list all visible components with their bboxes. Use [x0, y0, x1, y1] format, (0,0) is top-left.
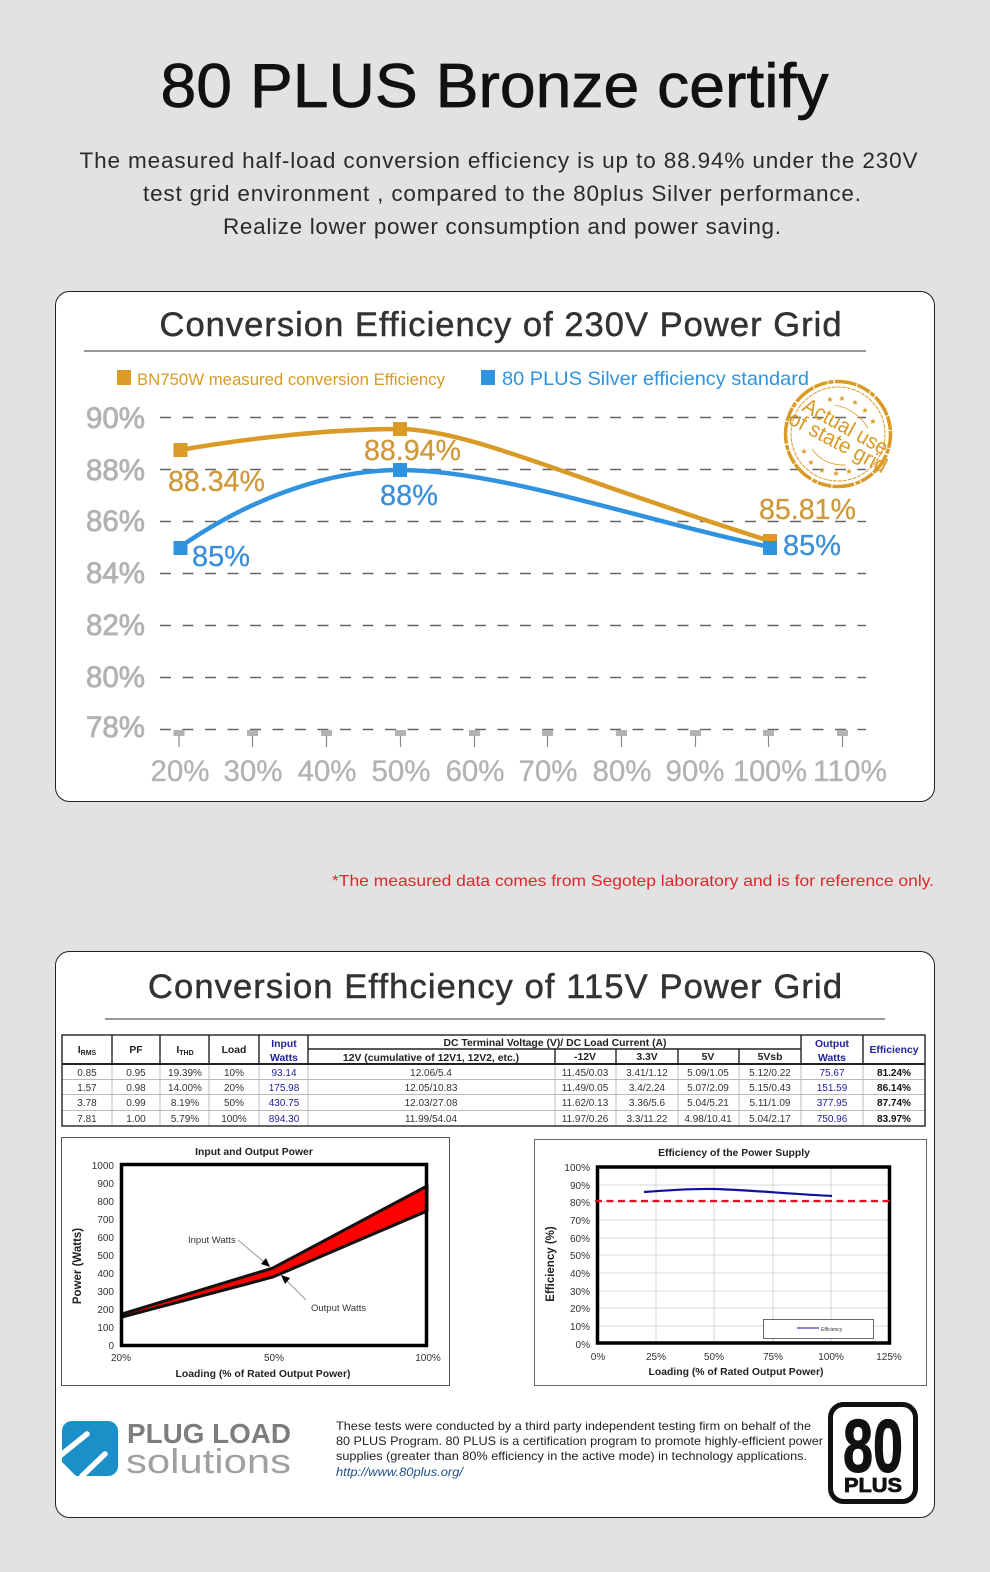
stamp: actual use of state grid: ★ — [845, 467, 853, 476]
intro text block — [80, 148, 918, 239]
x axis labels: 70% — [518, 755, 578, 788]
chart: input and output power: 600 — [97, 1233, 114, 1244]
testing note: 80 PLUS Program. 80 PLUS is a certification program to promote highly-efficient power — [336, 1434, 823, 1448]
table header: 5V — [702, 1052, 714, 1063]
y axis labels: 78% — [86, 711, 145, 744]
label: output watts arrow — [281, 1275, 366, 1314]
logo: plug load solutions: PLUG LOAD — [127, 1418, 291, 1449]
table rows: 11.62/0.13 — [562, 1098, 609, 1109]
y axis labels: 80% — [86, 661, 145, 694]
stamp: actual use of state grid: ★ — [818, 466, 826, 475]
chart: efficiency of the power supply: 10% — [570, 1322, 590, 1333]
table rows: 93.14 — [271, 1068, 297, 1079]
chart: input and output power: 0 — [108, 1341, 114, 1352]
series: measured efficiency line: 85.81% — [759, 494, 856, 526]
logo: plug load solutions: solutions — [126, 1443, 291, 1481]
chart: input and output power: 300 — [97, 1287, 114, 1298]
panel: 230V efficiency chart — [56, 292, 934, 802]
table header: 3.3V — [636, 1052, 658, 1063]
stamp: actual use of state grid: ★ — [869, 417, 877, 426]
series: measured efficiency line: 88.34% — [168, 466, 265, 498]
table rows: 50% — [224, 1098, 244, 1109]
data table — [62, 1035, 925, 1126]
table rows: 11.99/54.04 — [405, 1114, 457, 1125]
label: input watts arrow — [188, 1235, 270, 1267]
table rows: 750.96 — [817, 1114, 848, 1125]
chart: efficiency of the power supply: Efficiency (%) — [545, 1226, 557, 1302]
x axis labels: 100% — [733, 755, 807, 788]
chart: efficiency of the power supply: 75% — [763, 1352, 783, 1363]
heading: 115V chart: Conversion Effhciency of 115V Power Grid — [148, 968, 842, 1006]
table header: Input — [271, 1039, 297, 1050]
chart: efficiency of the power supply — [534, 1140, 926, 1386]
chart: efficiency of the power supply: 125% — [876, 1352, 902, 1363]
chart: efficiency of the power supply: 90% — [570, 1181, 590, 1192]
table rows: 83.97% — [877, 1114, 911, 1125]
testing note: http://www.80plus.org/ — [336, 1465, 465, 1479]
table rows: 100% — [221, 1114, 247, 1125]
table rows: 5.79% — [171, 1114, 199, 1125]
table rows: 5.09/1.05 — [687, 1068, 729, 1079]
table header: DC Terminal Voltage (V)/ DC Load Current (A) — [443, 1038, 667, 1049]
table rows: 377.95 — [817, 1098, 848, 1109]
logo: 80 plus: 80 — [843, 1404, 903, 1488]
chart: efficiency of the power supply: Efficiency of the Power Supply — [658, 1148, 810, 1159]
chart: input and output power: 100 — [97, 1323, 114, 1334]
chart: input and output power: 900 — [97, 1179, 114, 1190]
chart: efficiency of the power supply: 100% — [818, 1352, 844, 1363]
chart legend — [764, 1320, 874, 1338]
stamp: actual use of state grid: ★ — [851, 398, 859, 407]
table rows: 87.74% — [877, 1098, 911, 1109]
chart: input and output power: Loading (% of Rated Output Power) — [176, 1369, 350, 1380]
table rows: 11.97/0.26 — [562, 1114, 609, 1125]
chart: efficiency of the power supply: 50% — [570, 1251, 590, 1262]
chart: efficiency of the power supply: 60% — [570, 1234, 590, 1245]
table rows: 86.14% — [877, 1083, 911, 1094]
table rows: 11.45/0.03 — [562, 1068, 609, 1079]
table header: 5Vsb — [758, 1052, 782, 1063]
x axis labels: 110% — [813, 755, 887, 788]
table rows: 3.3/11.22 — [627, 1114, 668, 1125]
table rows: 5.15/0.43 — [749, 1083, 791, 1094]
x axis labels: 80% — [592, 755, 652, 788]
chart: input and output power: 1000 — [92, 1161, 114, 1172]
table rows: 1.00 — [126, 1114, 146, 1125]
table rows: 20% — [224, 1083, 244, 1094]
table header: Watts — [270, 1053, 298, 1064]
series: silver standard line — [174, 463, 841, 573]
chart: input and output power: 20% — [111, 1353, 131, 1364]
table rows: 7.81 — [77, 1114, 97, 1125]
table rows: 0.85 — [77, 1068, 97, 1079]
label: output watts arrow: Output Watts — [311, 1303, 366, 1314]
chart: input and output power: 800 — [97, 1197, 114, 1208]
table header: Load — [222, 1045, 246, 1056]
chart: efficiency of the power supply: 40% — [570, 1269, 590, 1280]
x axis labels: 20% — [150, 755, 210, 788]
table header: I — [78, 1045, 81, 1056]
series: silver standard line: 88% — [380, 480, 438, 512]
chart: efficiency of the power supply: 25% — [646, 1352, 666, 1363]
table rows: 12.05/10.83 — [405, 1083, 458, 1094]
table rows: 0.98 — [126, 1083, 146, 1094]
testing note: These tests were conducted by a third party independent testing firm on behalf of the — [336, 1419, 811, 1433]
table header: Watts — [818, 1053, 846, 1064]
chart: efficiency of the power supply: 20% — [570, 1304, 590, 1315]
logo: 80 plus — [830, 1404, 916, 1502]
table rows: 14.00% — [168, 1083, 202, 1094]
x axis labels: 60% — [445, 755, 505, 788]
table rows: 894.30 — [269, 1114, 300, 1125]
table header — [78, 1038, 919, 1064]
intro text block: Realize lower power consumption and power saving. — [223, 214, 781, 239]
title: 80 PLUS Bronze certify — [160, 52, 828, 121]
chart: input and output power: 50% — [264, 1353, 284, 1364]
chart: input and output power: 500 — [97, 1251, 114, 1262]
series: silver standard line: 85% — [192, 541, 250, 573]
table rows: 175.98 — [269, 1083, 300, 1094]
table header: PF — [129, 1045, 143, 1056]
table rows: 5.07/2.09 — [687, 1083, 729, 1094]
intro text block: The measured half-load conversion efficiency is up to 88.94% under the 230V — [80, 148, 918, 173]
chart: efficiency of the power supply: 50% — [704, 1352, 724, 1363]
table rows: 12.03/27.08 — [405, 1098, 458, 1109]
table header: RMS — [81, 1050, 97, 1057]
stamp: actual use of state grid: ★ — [800, 447, 808, 456]
table rows: 10% — [224, 1068, 244, 1079]
table rows: 3.36/5.6 — [629, 1098, 666, 1109]
testing note — [336, 1419, 823, 1479]
table rows — [77, 1068, 911, 1125]
chart: input and output power: 100% — [415, 1353, 441, 1364]
table rows: 3.41/1.12 — [626, 1068, 668, 1079]
table rows: 0.95 — [126, 1068, 146, 1079]
table header: Efficiency — [869, 1045, 919, 1056]
table rows: 8.19% — [171, 1098, 199, 1109]
label: input watts arrow: Input Watts — [188, 1235, 236, 1246]
table header: 12V (cumulative of 12V1, 12V2, etc.) — [343, 1053, 519, 1064]
table rows: 3.78 — [77, 1098, 97, 1109]
heading: 230V chart: Conversion Efficiency of 230V Power Grid — [160, 306, 842, 344]
stamp: actual use of state grid — [785, 382, 892, 486]
legend: measured efficiency: BN750W measured conversion Efficiency — [137, 370, 445, 389]
chart: input and output power — [62, 1138, 450, 1386]
x axis labels — [150, 755, 887, 788]
stamp: actual use of state grid: of state grid — [785, 406, 891, 478]
table rows: 4.98/10.41 — [684, 1114, 732, 1125]
table header: -12V — [574, 1052, 596, 1063]
legend: silver standard: 80 PLUS Silver efficiency standard — [502, 368, 809, 390]
table rows: 12.06/5.4 — [410, 1068, 452, 1079]
chart: efficiency of the power supply: 0% — [591, 1352, 605, 1363]
chart: input and output power: 400 — [97, 1269, 114, 1280]
table rows: 75.67 — [819, 1068, 845, 1079]
table header: Output — [815, 1039, 850, 1050]
testing note: supplies (greater than 80% efficiency in the active mode) in technology applications. — [336, 1449, 807, 1463]
table rows: 81.24% — [877, 1068, 911, 1079]
table header: THD — [179, 1050, 194, 1057]
y axis labels: 86% — [86, 505, 145, 538]
table rows: 430.75 — [269, 1098, 300, 1109]
series: measured efficiency line — [168, 422, 856, 548]
y axis labels: 82% — [86, 609, 145, 642]
chart: input and output power: 700 — [97, 1215, 114, 1226]
x axis labels: 50% — [371, 755, 431, 788]
chart: input and output power: 200 — [97, 1305, 114, 1316]
chart: efficiency of the power supply: 80% — [570, 1198, 590, 1209]
table rows: 19.39% — [168, 1068, 202, 1079]
stamp: actual use of state grid: ★ — [861, 406, 869, 415]
series: silver standard line: 85% — [783, 530, 841, 562]
table rows: 5.11/1.09 — [750, 1098, 791, 1109]
stamp: actual use of state grid: ★ — [838, 394, 846, 403]
chart: efficiency of the power supply: 70% — [570, 1216, 590, 1227]
logo: plug load solutions — [61, 1418, 291, 1481]
table rows: 3.4/2.24 — [629, 1083, 666, 1094]
panel: 115V test report — [56, 952, 934, 1518]
chart: efficiency of the power supply: 100% — [564, 1163, 590, 1174]
x axis labels: 90% — [665, 755, 725, 788]
x axis labels: 40% — [297, 755, 357, 788]
stamp: actual use of state grid: Actual use — [799, 393, 892, 460]
logo: 80 plus: PLUS — [844, 1474, 902, 1497]
chart: input and output power: Input and Output Power — [195, 1147, 313, 1158]
footnote: *The measured data comes from Segotep laboratory and is for reference only. — [332, 873, 934, 890]
stamp: actual use of state grid: ★ — [832, 469, 840, 478]
table rows: 11.49/0.05 — [562, 1083, 609, 1094]
stamp: actual use of state grid: ★ — [826, 395, 834, 404]
series: measured efficiency line: 88.94% — [364, 435, 461, 467]
chart legend: Efficiency — [821, 1327, 843, 1333]
chart: efficiency of the power supply: 0% — [576, 1340, 590, 1351]
table header: I — [176, 1045, 179, 1056]
table rows: 1.57 — [77, 1083, 97, 1094]
y axis labels: 84% — [86, 557, 145, 590]
stamp: actual use of state grid: ★ — [807, 458, 815, 467]
y axis labels: 90% — [86, 402, 145, 435]
chart: input and output power: Power (Watts) — [72, 1228, 84, 1304]
y axis labels — [86, 402, 145, 744]
table rows: 0.99 — [126, 1098, 146, 1109]
chart: efficiency of the power supply: Loading (% of Rated Output Power) — [649, 1367, 823, 1378]
x axis labels: 30% — [223, 755, 283, 788]
intro text block: test grid environment , compared to the 80plus Silver performance. — [143, 181, 861, 206]
chart: efficiency of the power supply: 30% — [570, 1287, 590, 1298]
table rows: 5.04/2.17 — [749, 1114, 791, 1125]
y axis labels: 88% — [86, 454, 145, 487]
table rows: 151.59 — [817, 1083, 848, 1094]
table rows: 5.12/0.22 — [749, 1068, 791, 1079]
table rows: 5.04/5.21 — [687, 1098, 729, 1109]
